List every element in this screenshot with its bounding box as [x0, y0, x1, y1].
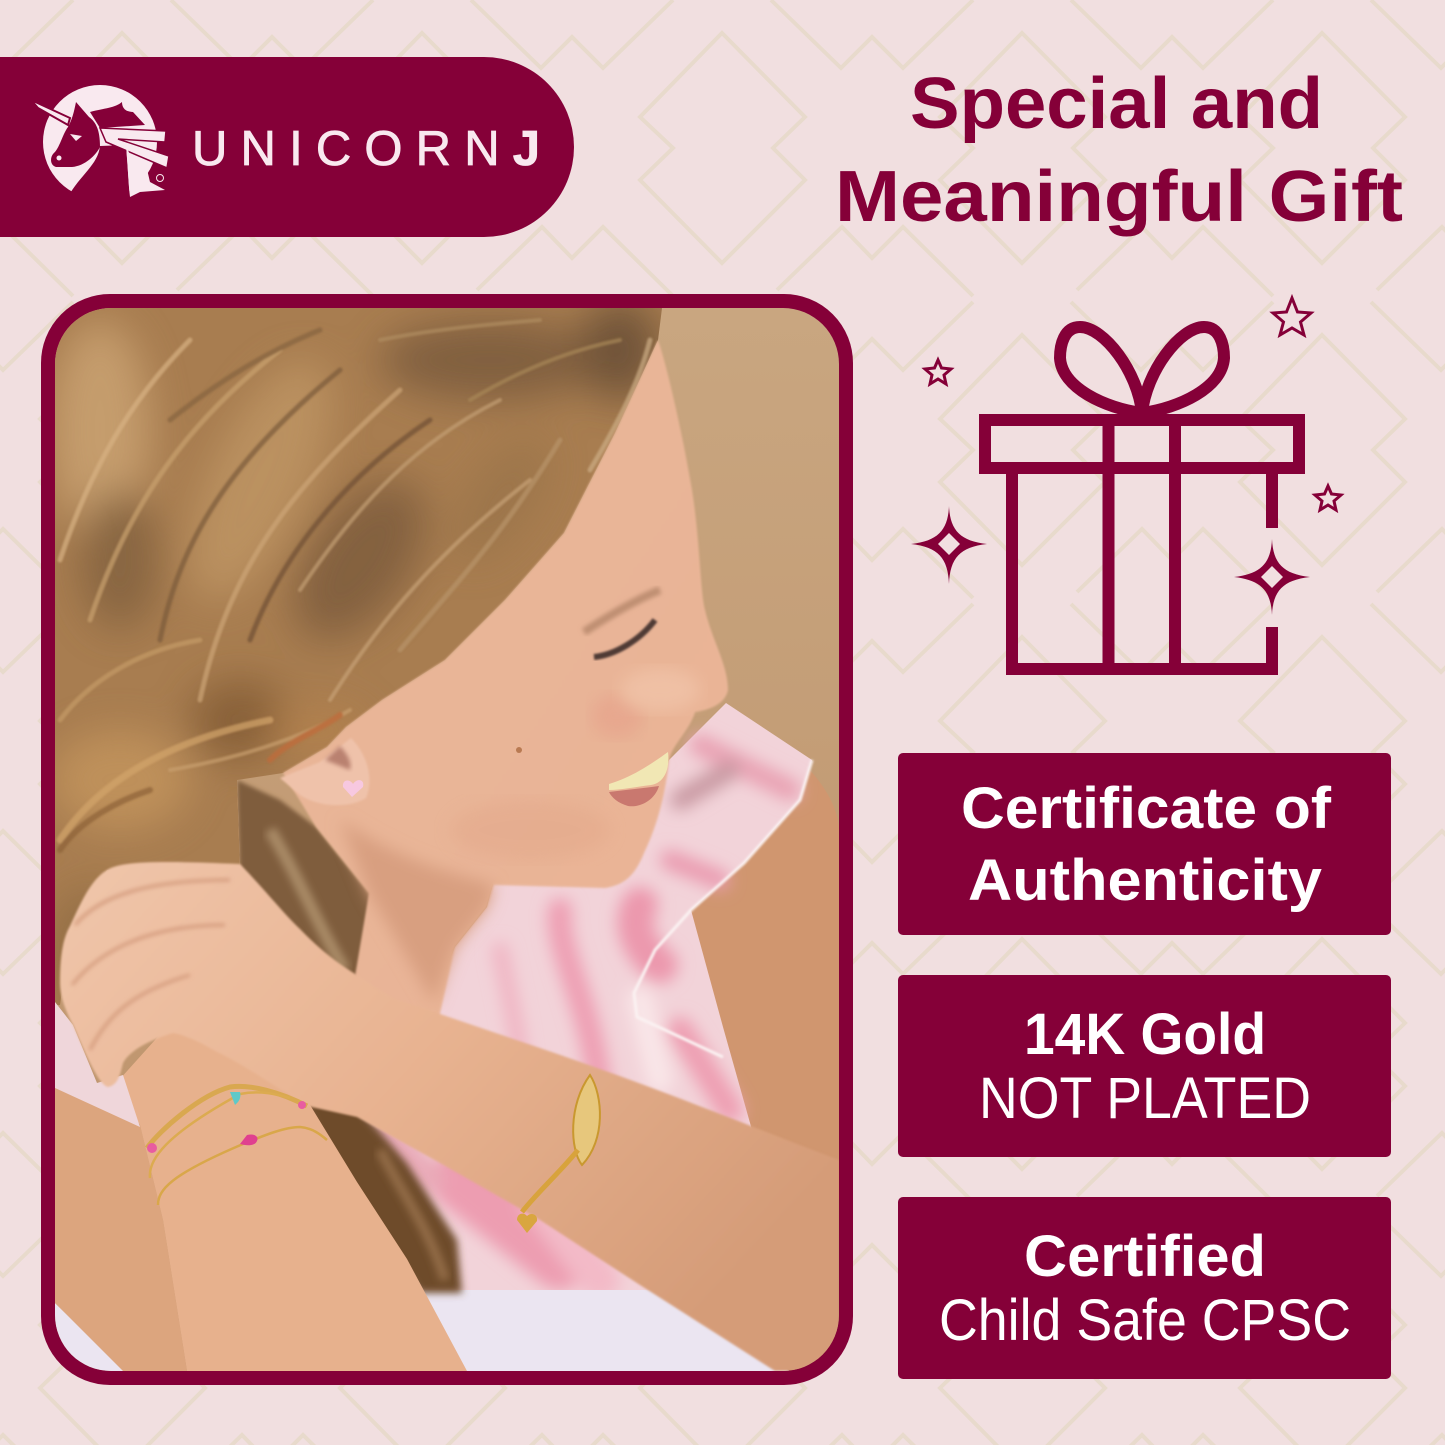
panel: certified child safe: Child Safe CPSC — [939, 1288, 1351, 1353]
icon: gift box — [911, 298, 1341, 669]
panel: certificate of authenticity — [898, 753, 1391, 935]
icon: sparkle right — [1234, 539, 1310, 615]
hair back lower — [237, 780, 369, 975]
face and neck — [283, 340, 728, 1040]
title: Meaningful Gift — [835, 157, 1403, 237]
icon: star left — [925, 360, 951, 384]
mole — [516, 747, 522, 753]
far lower arm — [55, 1088, 187, 1371]
logo wordmark: UNICORN J — [192, 122, 540, 176]
icon: heart earring — [343, 780, 363, 797]
icon: star large — [1273, 298, 1311, 335]
eye lashes — [584, 590, 660, 657]
title — [835, 64, 1403, 237]
dress sleeve — [55, 1002, 140, 1127]
finger lines — [72, 880, 230, 1050]
white sheet — [55, 1290, 790, 1371]
lid — [985, 420, 1299, 468]
wall — [55, 308, 839, 1371]
near forearm and hand — [60, 862, 839, 1371]
icon: star right — [1315, 486, 1341, 510]
title: Special and — [910, 64, 1323, 144]
panel: 14K gold: 14K Gold — [1024, 1002, 1266, 1067]
ear — [280, 738, 369, 805]
neck shading — [340, 820, 494, 1003]
panel: certified child safe: Certified — [1024, 1224, 1266, 1289]
hair main — [50, 300, 670, 1020]
dress — [340, 703, 812, 1295]
lower arm with bracelets — [110, 1020, 467, 1371]
panel: certificate of authenticity: Authenticity — [968, 848, 1322, 913]
logo banner — [0, 57, 574, 237]
bow — [1060, 327, 1224, 413]
icon: unicorn logo — [31, 85, 169, 200]
mouth — [609, 752, 668, 806]
panel: 14K gold: NOT PLATED — [979, 1066, 1311, 1131]
ribbon — [1108, 420, 1175, 669]
icon: sparkle left — [911, 506, 987, 584]
skin patch behind hair — [237, 782, 240, 864]
panel: certificate of authenticity: Certificate of — [961, 776, 1332, 841]
panel: 14K gold — [898, 975, 1391, 1157]
bracelets — [147, 1075, 600, 1233]
box body — [1012, 468, 1272, 669]
shoulder and far arm — [692, 772, 839, 1161]
panel: certified child safe — [898, 1197, 1391, 1379]
panel: photo of girl — [48, 300, 846, 1378]
